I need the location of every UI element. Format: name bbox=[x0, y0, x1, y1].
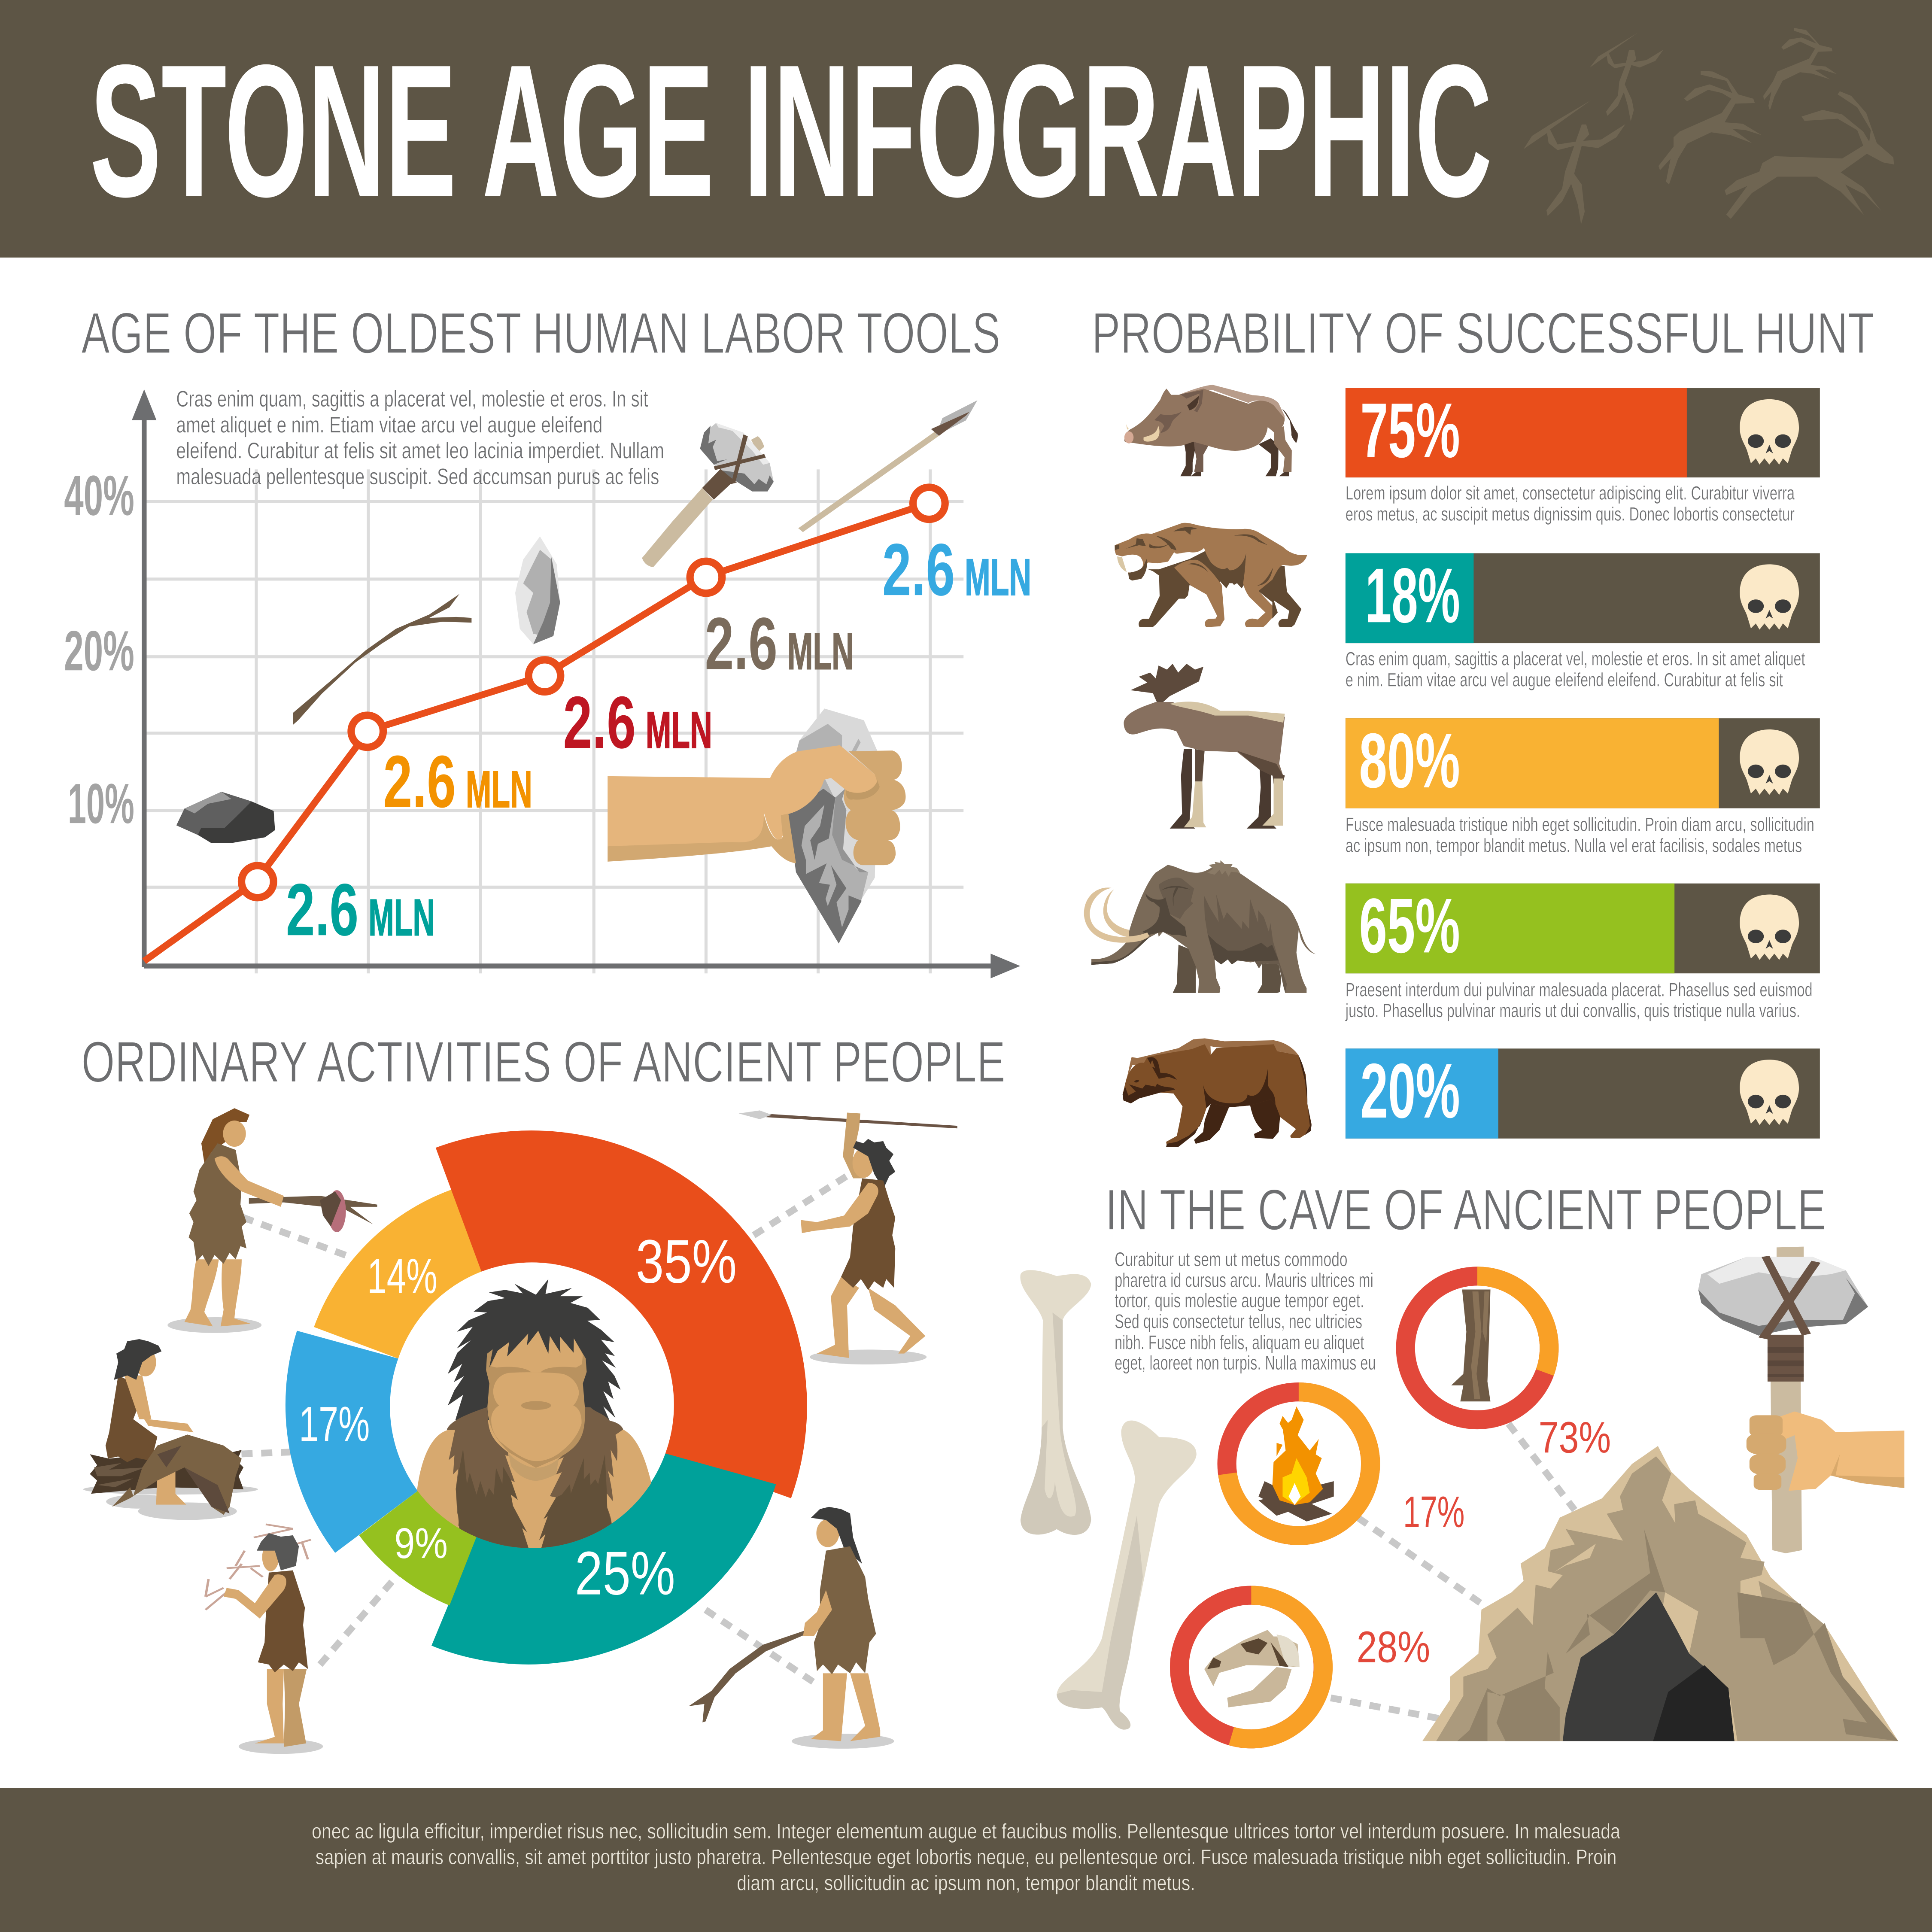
bar: 18%: 18% bbox=[1365, 552, 1460, 639]
icon: spear bbox=[798, 400, 977, 532]
icon: campfire bbox=[1258, 1406, 1334, 1522]
dashed connectors to cave bbox=[1331, 1424, 1575, 1719]
figure: gatherer with meat on a stick bbox=[167, 1108, 377, 1333]
icon: dinosaur skull bbox=[1204, 1630, 1300, 1707]
donut percent labels: 9% bbox=[394, 1519, 448, 1567]
icon: moose bbox=[1124, 664, 1285, 829]
footer band bbox=[0, 1788, 1932, 1932]
bar: 18% bbox=[1346, 552, 1820, 643]
donut percent labels bbox=[299, 1227, 737, 1608]
icon: upper bone bbox=[1020, 1270, 1091, 1535]
value label: crimson bbox=[563, 681, 712, 764]
heading: ordinary activities of ancient people: ORDINARY ACTIVITIES OF ANCIENT PEOPLE bbox=[81, 1030, 1005, 1094]
cave description text bbox=[1115, 1248, 1376, 1374]
y axis labels bbox=[64, 464, 134, 835]
central caveman portrait bbox=[417, 1279, 651, 1554]
dashed connectors bbox=[241, 1176, 848, 1686]
header band bbox=[0, 0, 1932, 258]
ring: fire 17% bbox=[1227, 1392, 1370, 1536]
cave description text: Curabitur ut sem ut metus commodo bbox=[1115, 1248, 1348, 1270]
chart description text: malesuada pellentesque suscipit. Sed accumsan purus ac felis bbox=[176, 464, 659, 489]
bar: 75% bbox=[1346, 387, 1820, 477]
chart description text: Cras enim quam, sagittis a placerat vel, molestie et eros. In sit bbox=[176, 386, 648, 412]
bar caption 65% bbox=[1345, 979, 1813, 1021]
icon: flint flake bbox=[515, 536, 560, 644]
figure: cave painter bbox=[206, 1525, 323, 1754]
footer text: onec ac ligula efficitur, imperdiet risus nec, sollicitudin sem. Integer elementum augue et faucibus mollis. Pellentesque ultrices tortor vel interdum posuere. In malesuada bbox=[312, 1820, 1621, 1843]
icon: lower bone bbox=[1057, 1421, 1197, 1730]
chart axes bbox=[132, 389, 1020, 978]
icon: sabertooth bbox=[1115, 523, 1307, 627]
y axis labels: 10% bbox=[68, 772, 134, 835]
figure: hunter with spear bbox=[738, 1110, 957, 1364]
panel: line chart of tool ages bbox=[64, 386, 1031, 978]
bar caption 18% bbox=[1346, 649, 1805, 691]
bar: 80%: 80% bbox=[1359, 717, 1460, 804]
icon: cave bbox=[1422, 1446, 1898, 1741]
donut percent labels: 14% bbox=[367, 1249, 437, 1304]
cave description text: eget, laoreet non turpis. Nulla maximus eu bbox=[1115, 1352, 1376, 1374]
icon: cave paintings of hunters and deer bbox=[1524, 28, 1894, 224]
cave description text: Sed quis consectetur tellus, nec ultricies bbox=[1115, 1310, 1362, 1333]
bar: 65%: 65% bbox=[1359, 882, 1460, 969]
panel: cave resources bbox=[1020, 1247, 1904, 1741]
panel: hunt probability bars bbox=[1084, 385, 1820, 1147]
icon: hand holding stone blade bbox=[608, 708, 905, 944]
donut percent labels: 17% bbox=[299, 1397, 370, 1452]
segment 14% bbox=[314, 1190, 481, 1358]
panel: activities donut and figures bbox=[83, 1108, 957, 1754]
value label: brown bbox=[705, 602, 854, 685]
value label: teal: MLN bbox=[368, 888, 435, 946]
y axis labels: 20% bbox=[64, 619, 134, 682]
value label: crimson: MLN bbox=[646, 701, 712, 759]
chart description text: amet aliquet e nim. Etiam vitae arcu vel augue eleifend bbox=[176, 412, 602, 437]
bar caption 80% bbox=[1346, 814, 1814, 857]
ring: wood 73% bbox=[1406, 1276, 1549, 1420]
value label: crimson: 2.6 bbox=[563, 681, 636, 764]
bar: 20% bbox=[1346, 1048, 1820, 1139]
bar: 80% bbox=[1346, 717, 1820, 808]
ring value labels: 28% bbox=[1357, 1622, 1430, 1671]
bar: 20%: 20% bbox=[1360, 1048, 1460, 1134]
icon: boar bbox=[1124, 385, 1298, 476]
chart description text bbox=[176, 386, 664, 489]
footer text bbox=[312, 1820, 1621, 1895]
y axis labels: 40% bbox=[64, 464, 134, 527]
value label: orange bbox=[383, 741, 532, 823]
icon: branch bbox=[293, 594, 471, 725]
value label: blue: 2.6 bbox=[882, 529, 955, 611]
value label: blue: MLN bbox=[965, 548, 1031, 606]
value label: brown: 2.6 bbox=[705, 602, 778, 685]
bar caption 18%: e nim. Etiam vitae arcu vel augue eleifend eleifend. Curabitur at felis sit bbox=[1346, 670, 1783, 691]
value label: brown: MLN bbox=[787, 622, 854, 680]
donut percent labels: 35% bbox=[636, 1227, 737, 1296]
bar: 75%: 75% bbox=[1360, 387, 1460, 474]
icon: hand raising stone club bbox=[1698, 1247, 1904, 1553]
footer text: diam arcu, sollicitudin ac ipsum non, tempor blandit metus. bbox=[737, 1871, 1195, 1895]
donut chart bbox=[286, 1130, 807, 1665]
ring value labels bbox=[1357, 1413, 1611, 1671]
bar caption 75% bbox=[1346, 483, 1795, 525]
value label: teal: 2.6 bbox=[286, 869, 358, 951]
heading: age of the oldest human labor tools: AGE OF THE OLDEST HUMAN LABOR TOOLS bbox=[81, 301, 1000, 365]
icon: tree trunk bbox=[1451, 1290, 1491, 1401]
segment 9% bbox=[359, 1491, 477, 1605]
icon: bear bbox=[1123, 1038, 1312, 1147]
figure: seated skinning a hide bbox=[83, 1339, 258, 1520]
icon: mammoth bbox=[1084, 860, 1315, 993]
cave description text: tortor, quis molestie augue tempor eget. bbox=[1115, 1289, 1364, 1312]
value label: orange: MLN bbox=[466, 760, 532, 818]
segment 25% bbox=[431, 1453, 776, 1665]
icon: rock bbox=[176, 792, 275, 843]
ring value labels: 73% bbox=[1539, 1413, 1611, 1462]
donut percent labels: 25% bbox=[575, 1539, 675, 1608]
value label: orange: 2.6 bbox=[383, 741, 456, 823]
segment 35% bbox=[436, 1130, 807, 1498]
icon: stone axe bbox=[642, 423, 774, 567]
cave description text: nibh. Fusce nibh felis, aliquam eu aliquet bbox=[1115, 1331, 1364, 1354]
ring: bones 28% bbox=[1179, 1595, 1323, 1739]
value label: teal bbox=[286, 869, 435, 951]
segment 17% bbox=[286, 1331, 418, 1553]
ring value labels: 17% bbox=[1403, 1487, 1464, 1537]
data line bbox=[144, 503, 930, 961]
bar: 65% bbox=[1346, 882, 1820, 973]
value label: blue bbox=[882, 529, 1031, 611]
cave description text: pharetra id cursus arcu. Mauris ultrices mi bbox=[1115, 1269, 1373, 1291]
figure: gatherer with branch bbox=[689, 1507, 894, 1749]
data point markers bbox=[241, 487, 945, 898]
chart description text: eleifend. Curabitur at felis sit amet leo lacinia imperdiet. Nullam bbox=[176, 438, 664, 464]
footer text: sapien at mauris convallis, sit amet porttitor justo pharetra. Pellentesque eget lobortis neque, eu pellentesque orci. Fusce malesuada tristique nibh eget sollicitudin. Proin bbox=[316, 1846, 1616, 1869]
